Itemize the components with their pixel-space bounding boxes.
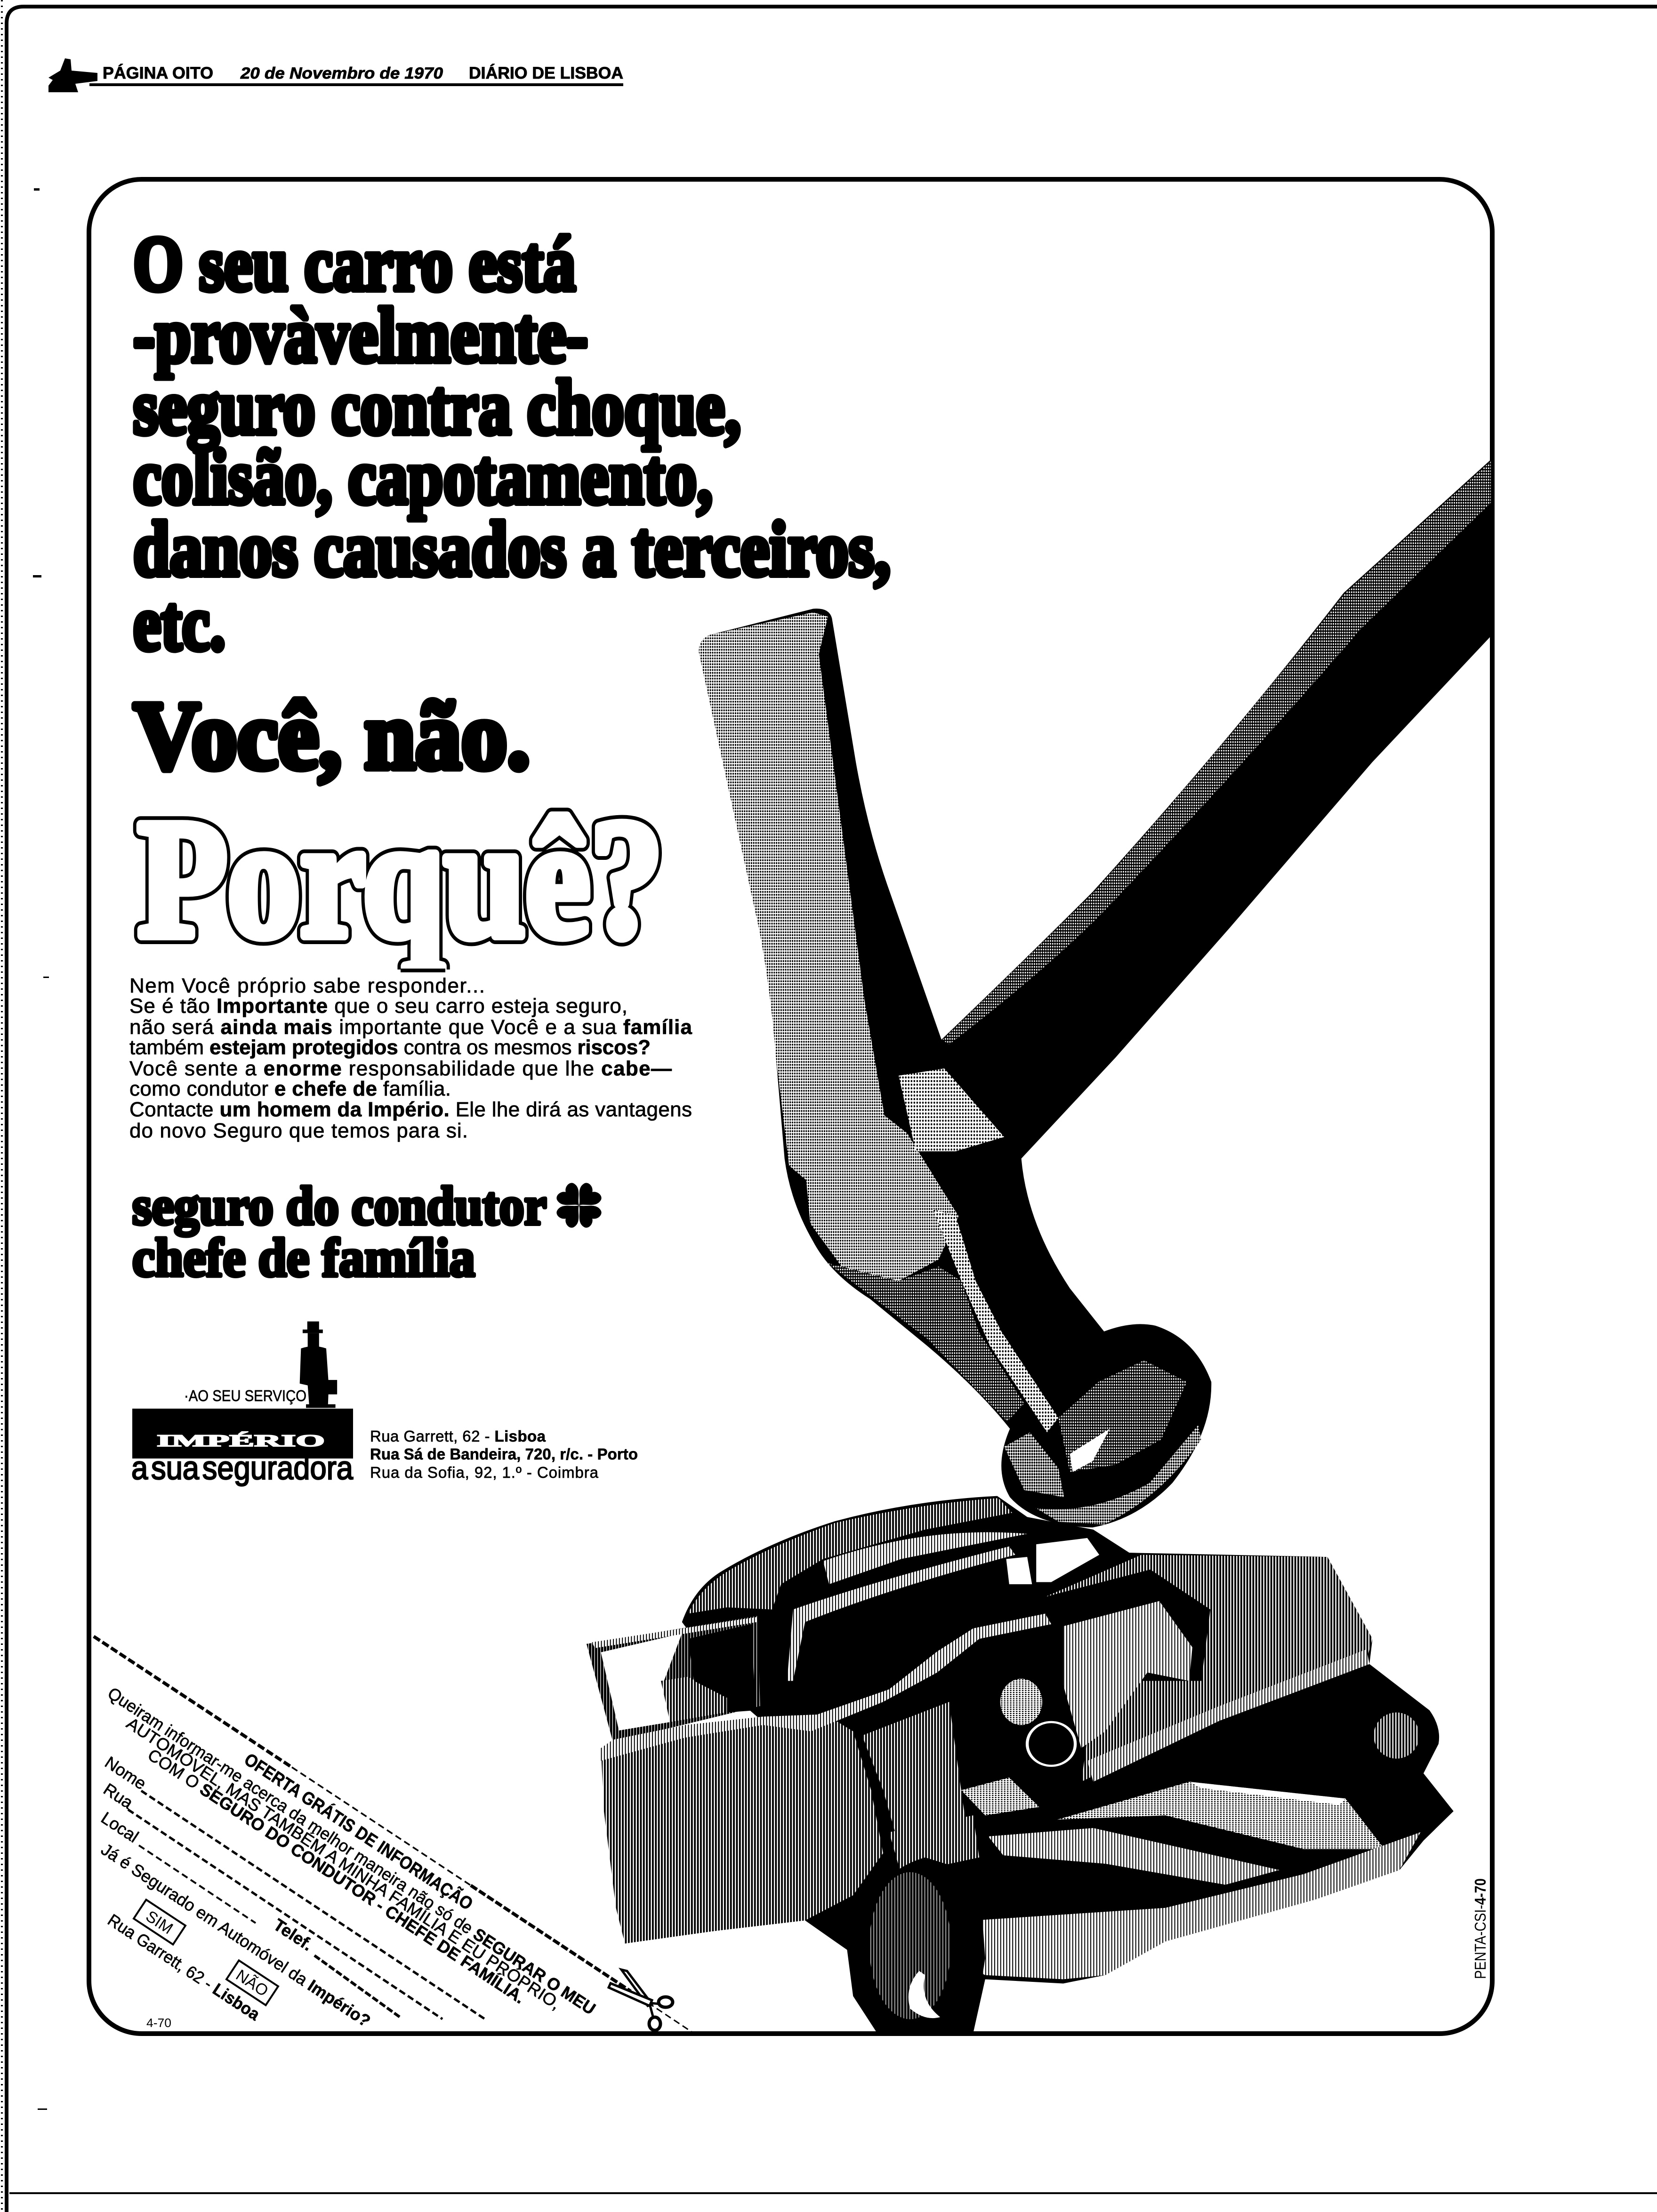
black name plate (132, 1409, 353, 1459)
claw face (699, 612, 958, 1281)
coupon question: Já é Segurado em Automóvel da Império? (98, 1839, 374, 2031)
field: nome (102, 1752, 485, 2019)
headline line 5: danos causados a terceiros, (133, 505, 891, 592)
icon: man with briefcase (300, 1322, 337, 1408)
body line 2: Se é tão Importante que o seu carro esteja seguro, (129, 994, 627, 1018)
company strapline: a sua seguradora (131, 1450, 353, 1486)
pillar glint (1006, 1557, 1032, 1584)
checkbox nao: NÃO (233, 1966, 272, 2000)
addresses (370, 1427, 638, 1481)
newspaper name: DIÁRIO DE LISBOA (469, 64, 623, 82)
windscreen remnant (1036, 1538, 1099, 1582)
newspaper header (48, 58, 623, 92)
coupon cut line (94, 1636, 693, 2033)
field: local and telefone: Telef. (270, 1915, 316, 1955)
header rule (89, 83, 623, 86)
engine highlight (1000, 1679, 1042, 1725)
coupon text line 2: AUTOMÓVEL, MAS TAMBÉM A MINHA FAMÍLIA E EU PRÓPRIO, (123, 1713, 564, 2013)
margin specks (33, 188, 49, 2110)
centre column tone (889, 1815, 979, 1874)
engine loop (1027, 1722, 1075, 1766)
tagline: ·AO SEU SERVIÇO (184, 1387, 306, 1404)
checkbox sim: SIM (143, 1907, 176, 1938)
headline line 1: O seu carro está (133, 220, 576, 307)
icon: scissors (609, 1970, 673, 2030)
headline line 4: colisão, capotamento, (133, 433, 713, 520)
bonnet fold (1063, 1601, 1192, 1748)
car bonnet (1045, 1555, 1373, 1782)
striking face highlight (1058, 1360, 1187, 1472)
roof panel (688, 1498, 1012, 1614)
advert frame (89, 179, 1492, 2034)
door panel (601, 1716, 883, 1944)
interior shade (661, 1677, 726, 1722)
coupon title: OFERTA GRÁTIS DE INFORMAÇÃO (241, 1749, 477, 1914)
hammer (699, 460, 1491, 1527)
neck band (933, 1209, 1058, 1432)
coupon (94, 1636, 693, 2033)
grille top glint (1190, 1782, 1345, 1805)
address lisboa: Rua Garrett, 62 - Lisboa (370, 1427, 546, 1445)
headline line 6: etc. (133, 580, 225, 666)
icon: four-leaf clover (555, 1181, 603, 1230)
field: rua (100, 1779, 442, 2019)
headlight lens (1374, 1712, 1419, 1759)
door sill highlight (601, 1614, 1051, 1761)
wheel hub (909, 1971, 940, 2018)
field: nome: Nome (102, 1752, 150, 1794)
body line 6: como condutor e chefe de família. (129, 1077, 451, 1100)
window top sill (592, 1617, 757, 1648)
field: local and telefone: Local (98, 1808, 142, 1846)
headlight (1360, 1703, 1439, 1768)
agency credit: PENTA-CSI-4-70 (1472, 1878, 1489, 1979)
door window frame (587, 1616, 760, 1742)
body line 4: também estejam protegidos contra os mesmos riscos? (129, 1036, 651, 1059)
grille (1057, 1782, 1384, 1849)
company name: IMPÉRIO (157, 1431, 325, 1450)
striking face rim (1004, 1432, 1064, 1497)
front wheel (853, 1858, 985, 2033)
coupon code: 4-70 (146, 2016, 171, 2030)
outlined heading: porquê: Porquê? (138, 785, 663, 973)
address porto: Rua Sá de Bandeira, 720, r/c. - Porto (370, 1445, 638, 1463)
product line 1: seguro do condutor (132, 1176, 547, 1236)
lower bumper (919, 1832, 1421, 1980)
outlined heading: porquê: Porquê? (138, 785, 663, 973)
body copy (129, 974, 692, 1142)
car silhouette (682, 1496, 1454, 2033)
body line 5: Você sente a enorme responsabilidade que lhe cabe— (129, 1057, 672, 1080)
roof crease (823, 1532, 1027, 1584)
headline (133, 220, 891, 666)
coupon address: Rua Garrett, 62 - Lisboa (105, 1910, 264, 2024)
handle hatching (942, 461, 1491, 1045)
shoulder highlight (899, 1068, 1004, 1151)
door window glass (601, 1634, 682, 1731)
upper trim strip (787, 1547, 1015, 1681)
product line 2: chefe de família (132, 1228, 475, 1288)
subheading: você, não: Você, não. (134, 681, 530, 789)
field: local and telefone (98, 1808, 401, 2018)
product name (132, 1176, 547, 1288)
coupon text line 3: COM O SEGURO DO CONDUTOR - CHEFE DE FAMÍLIA. (145, 1745, 529, 2007)
page label: PÁGINA OITO (103, 64, 213, 82)
address coimbra: Rua da Sofia, 92, 1.º - Coimbra (370, 1464, 599, 1481)
date: 20 de Novembro de 1970 (240, 64, 443, 82)
checkbox sim (134, 1899, 185, 1945)
hammer silhouette (699, 460, 1491, 1527)
checkbox nao (226, 1960, 278, 2005)
coupon text line 1: Queiram informar-me acerca da melhor maneira não só de SEGURAR O MEU (105, 1683, 599, 2019)
body line 7: Contacte um homem da Império. Ele lhe dirá as vantagens (129, 1098, 692, 1121)
lower neck shading (828, 1263, 1024, 1421)
suspension pieces (961, 1778, 1039, 1815)
império logo block (131, 1322, 353, 1486)
headline line 2: -provàvelmente- (133, 292, 588, 378)
interior frame (688, 1624, 756, 1712)
body line 8: do novo Seguro que temos para si. (129, 1119, 468, 1142)
centre wreck tone (862, 1702, 967, 1853)
headline line 3: seguro contra choque, (133, 364, 741, 451)
crushed car (587, 1496, 1454, 2033)
header ornament (48, 58, 97, 92)
lower rim (1036, 1425, 1201, 1524)
field: rua: Rua (100, 1779, 137, 1813)
body line 3: não será ainda mais importante que Você e a sua família (129, 1016, 692, 1039)
bonnet lower lip (1087, 1650, 1369, 1782)
body line 1: Nem Você próprio sabe responder... (129, 974, 485, 997)
tyre tread (869, 1872, 951, 2019)
striking face glint (1070, 1429, 1110, 1472)
bumper fold (988, 1828, 1279, 1885)
